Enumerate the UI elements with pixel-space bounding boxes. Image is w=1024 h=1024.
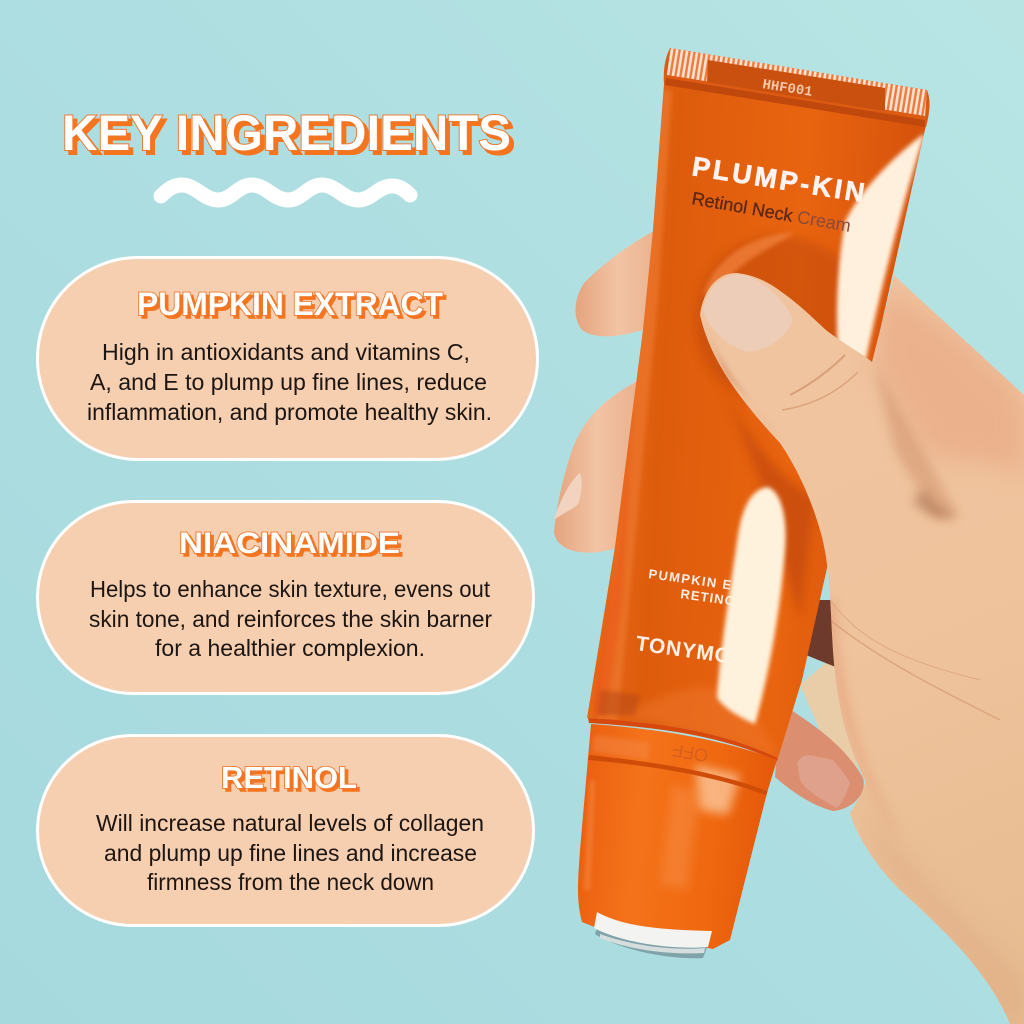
body text: niacinamide xyxy=(89,576,492,661)
thumbnail xyxy=(703,275,793,352)
heading: niacinamide: NIACINAMIDE xyxy=(179,527,400,560)
cap OFF marking: OFF xyxy=(671,740,710,766)
tube crimp top xyxy=(664,48,930,127)
highlight: lower reflection xyxy=(717,487,786,724)
body text: niacinamide: Helps to enhance skin texture, evens out xyxy=(90,576,491,602)
tube label: PLUMP-KIN: PLUMP-KIN xyxy=(690,151,870,209)
heading: retinol: RETINOL xyxy=(224,763,360,798)
title: KEY INGREDIENTS: KEY INGREDIENTS xyxy=(62,105,511,161)
tube body xyxy=(587,84,926,758)
roller cap xyxy=(578,724,777,949)
body text: niacinamide: for a healthier complexion. xyxy=(155,635,425,661)
heading: pumpkin extract: PUMPKIN EXTRACT xyxy=(140,289,446,325)
body text: pumpkin extract: High in antioxidants and vitamins C, xyxy=(102,339,470,365)
pale finger behind palm xyxy=(800,655,860,780)
title: KEY INGREDIENTS: KEY INGREDIENTS xyxy=(66,109,515,165)
dark shadow between tube and palm xyxy=(806,600,838,668)
heading: niacinamide: NIACINAMIDE xyxy=(182,530,403,563)
middle finger behind tube xyxy=(554,380,640,553)
product tube xyxy=(570,48,940,958)
tube label: Tonymo: TONYMO xyxy=(634,632,733,668)
panel: pumpkin extract xyxy=(38,258,538,460)
tube batch code: HHF001 xyxy=(761,77,814,101)
body text: retinol: and plump up fine lines and increase xyxy=(104,840,477,866)
tube label: Retinol Neck Cream: Retinol Neck Cream xyxy=(690,188,852,236)
body text: pumpkin extract: inflammation, and promote healthy skin. xyxy=(87,399,492,425)
tube label: Pumpkin Ex: PUMPKIN EX xyxy=(648,566,744,594)
tube bottom rim line xyxy=(588,718,778,761)
body text: niacinamide: skin tone, and reinforces the skin barner xyxy=(89,606,492,632)
decorative wave under title xyxy=(161,185,410,200)
roller applicator xyxy=(594,912,712,958)
body text: retinol xyxy=(96,810,484,895)
body text: pumpkin extract xyxy=(87,339,492,425)
body text: pumpkin extract: A, and E to plump up fine lines, reduce xyxy=(90,369,487,395)
panel: retinol xyxy=(38,736,534,926)
ring finger below tube xyxy=(775,703,864,811)
index finger behind tube xyxy=(576,228,660,336)
palm and thumb xyxy=(690,260,1024,1024)
heading: pumpkin extract: PUMPKIN EXTRACT xyxy=(137,286,443,322)
body text: retinol: firmness from the neck down xyxy=(147,869,434,895)
photo: hand holding product tube xyxy=(554,48,1024,1024)
highlight: upper right reflection xyxy=(837,133,925,360)
body text: retinol: Will increase natural levels of collagen xyxy=(96,810,484,836)
tube label: Retino: RETINO xyxy=(680,586,737,609)
heading: retinol: RETINOL xyxy=(221,760,357,795)
panel: niacinamide xyxy=(38,502,534,694)
